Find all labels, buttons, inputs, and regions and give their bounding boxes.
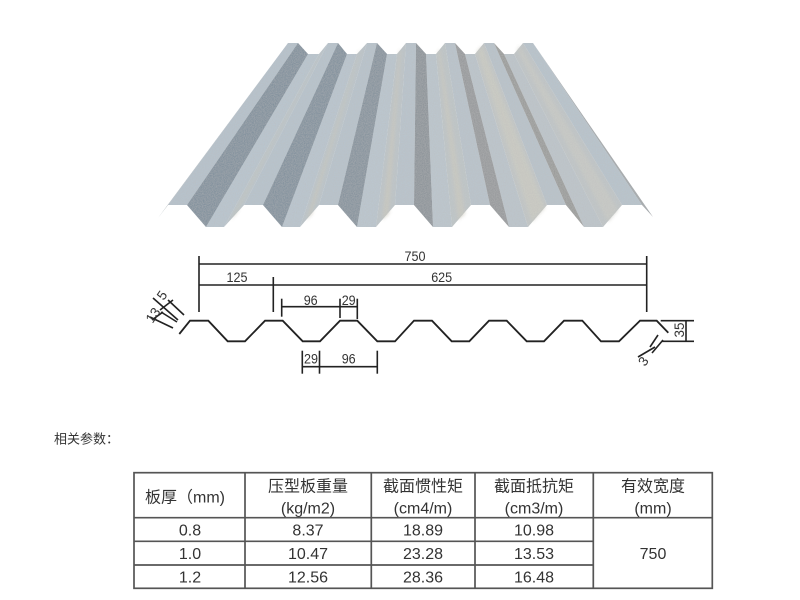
dimension labels: 29 bbox=[342, 293, 356, 308]
ridge flats bbox=[168, 43, 298, 205]
parameter table bbox=[134, 473, 712, 588]
table header: (kg/m2) bbox=[281, 500, 335, 518]
table values: 8.37 bbox=[292, 523, 324, 540]
profile cross-section drawing bbox=[150, 256, 694, 374]
table values: 23.28 bbox=[403, 546, 443, 563]
table grid bbox=[134, 473, 712, 588]
table values: 12.56 bbox=[288, 569, 328, 586]
table values: 18.89 bbox=[403, 523, 443, 540]
upper dimension lines 96 and 29 bbox=[282, 299, 357, 319]
table values: 16.48 bbox=[514, 569, 554, 586]
table header: 截面抵抗矩 bbox=[494, 478, 574, 496]
section label: 相关参数： bbox=[54, 432, 119, 446]
table header bbox=[145, 478, 685, 518]
valley flats bbox=[206, 54, 319, 227]
table header: 截面惯性矩 bbox=[383, 478, 463, 496]
dimension labels: 5 bbox=[154, 288, 170, 303]
table header: 有效宽度 bbox=[621, 478, 685, 496]
cream highlights on rising slopes bbox=[230, 46, 618, 222]
corrugated steel sheet illustration bbox=[158, 43, 653, 227]
table header: (mm) bbox=[634, 500, 672, 518]
dimension labels: 13 bbox=[143, 305, 164, 326]
dimension labels: 125 bbox=[226, 270, 248, 285]
right edge dimension lines bbox=[638, 321, 694, 357]
lower dimension lines 29 and 96 bbox=[302, 351, 377, 374]
dimension labels: 750 bbox=[404, 249, 426, 264]
table values: 0.8 bbox=[179, 523, 201, 540]
table header: (cm3/m) bbox=[505, 500, 563, 518]
dimension labels: 35 bbox=[672, 322, 687, 338]
table values: 28.36 bbox=[403, 569, 443, 586]
left edge dimension lines bbox=[150, 298, 184, 328]
table header: 压型板重量 bbox=[268, 478, 348, 496]
table values: 10.98 bbox=[514, 523, 554, 540]
table header: (cm4/m) bbox=[394, 500, 452, 518]
table values: 10.47 bbox=[288, 546, 328, 563]
dimension labels: 625 bbox=[431, 270, 452, 285]
rising slopes bbox=[224, 43, 328, 227]
dimension labels: 29 bbox=[304, 352, 318, 366]
table values: 13.53 bbox=[514, 546, 554, 563]
shaded falling slopes bbox=[187, 43, 308, 227]
left and right edge slivers bbox=[158, 43, 288, 218]
table values bbox=[179, 523, 666, 586]
table values: 750 bbox=[640, 546, 666, 563]
dimension labels: 3 bbox=[635, 354, 652, 369]
dimension lines 750 and 625 bbox=[199, 256, 647, 312]
dimension labels: 96 bbox=[304, 293, 318, 308]
dimension labels bbox=[143, 249, 687, 369]
table header: 板厚（mm) bbox=[145, 488, 225, 506]
table values: 1.2 bbox=[179, 569, 201, 586]
table values: 1.0 bbox=[179, 546, 201, 563]
dimension labels: 96 bbox=[342, 352, 356, 366]
sheet profile line bbox=[179, 321, 668, 341]
